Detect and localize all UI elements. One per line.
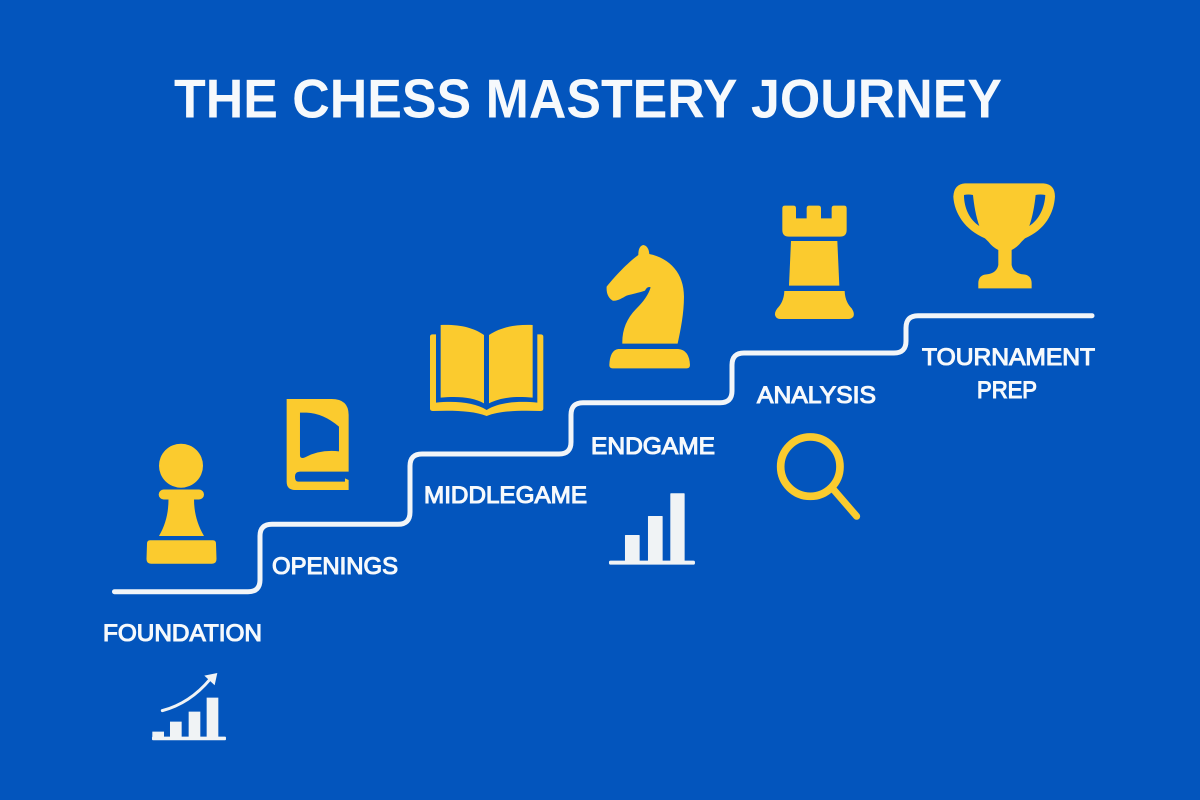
stage 1: foundation bbox=[103, 444, 262, 740]
icon: knight bbox=[607, 245, 690, 368]
icon: growth chart with arrow bbox=[152, 673, 226, 740]
stage 3: middlegame bbox=[424, 325, 587, 509]
label: endgame: ENDGAME bbox=[591, 433, 715, 460]
staircase path bbox=[114, 316, 1092, 592]
label: openings: OPENINGS bbox=[272, 553, 398, 580]
icon: bar chart bbox=[609, 493, 695, 565]
title: THE CHESS MASTERY JOURNEY bbox=[174, 68, 1002, 130]
icon: open book bbox=[430, 325, 543, 416]
icon: magnifying glass bbox=[781, 437, 857, 516]
label: analysis: ANALYSIS bbox=[757, 382, 876, 409]
stage 5: analysis bbox=[757, 206, 876, 516]
label: tournament prep bbox=[922, 344, 1095, 404]
stage 2: openings bbox=[272, 399, 398, 580]
icon: rook bbox=[775, 206, 854, 319]
label: middlegame: MIDDLEGAME bbox=[424, 482, 587, 509]
icon: trophy bbox=[953, 183, 1055, 288]
icon: closed book bbox=[287, 399, 349, 490]
label: foundation: FOUNDATION bbox=[103, 620, 262, 647]
icon: pawn bbox=[146, 444, 216, 564]
label: tournament prep: PREP bbox=[977, 377, 1037, 404]
stage 6: tournament prep bbox=[922, 183, 1095, 404]
stage 4: endgame bbox=[591, 245, 715, 565]
label: tournament prep: TOURNAMENT bbox=[922, 344, 1095, 371]
